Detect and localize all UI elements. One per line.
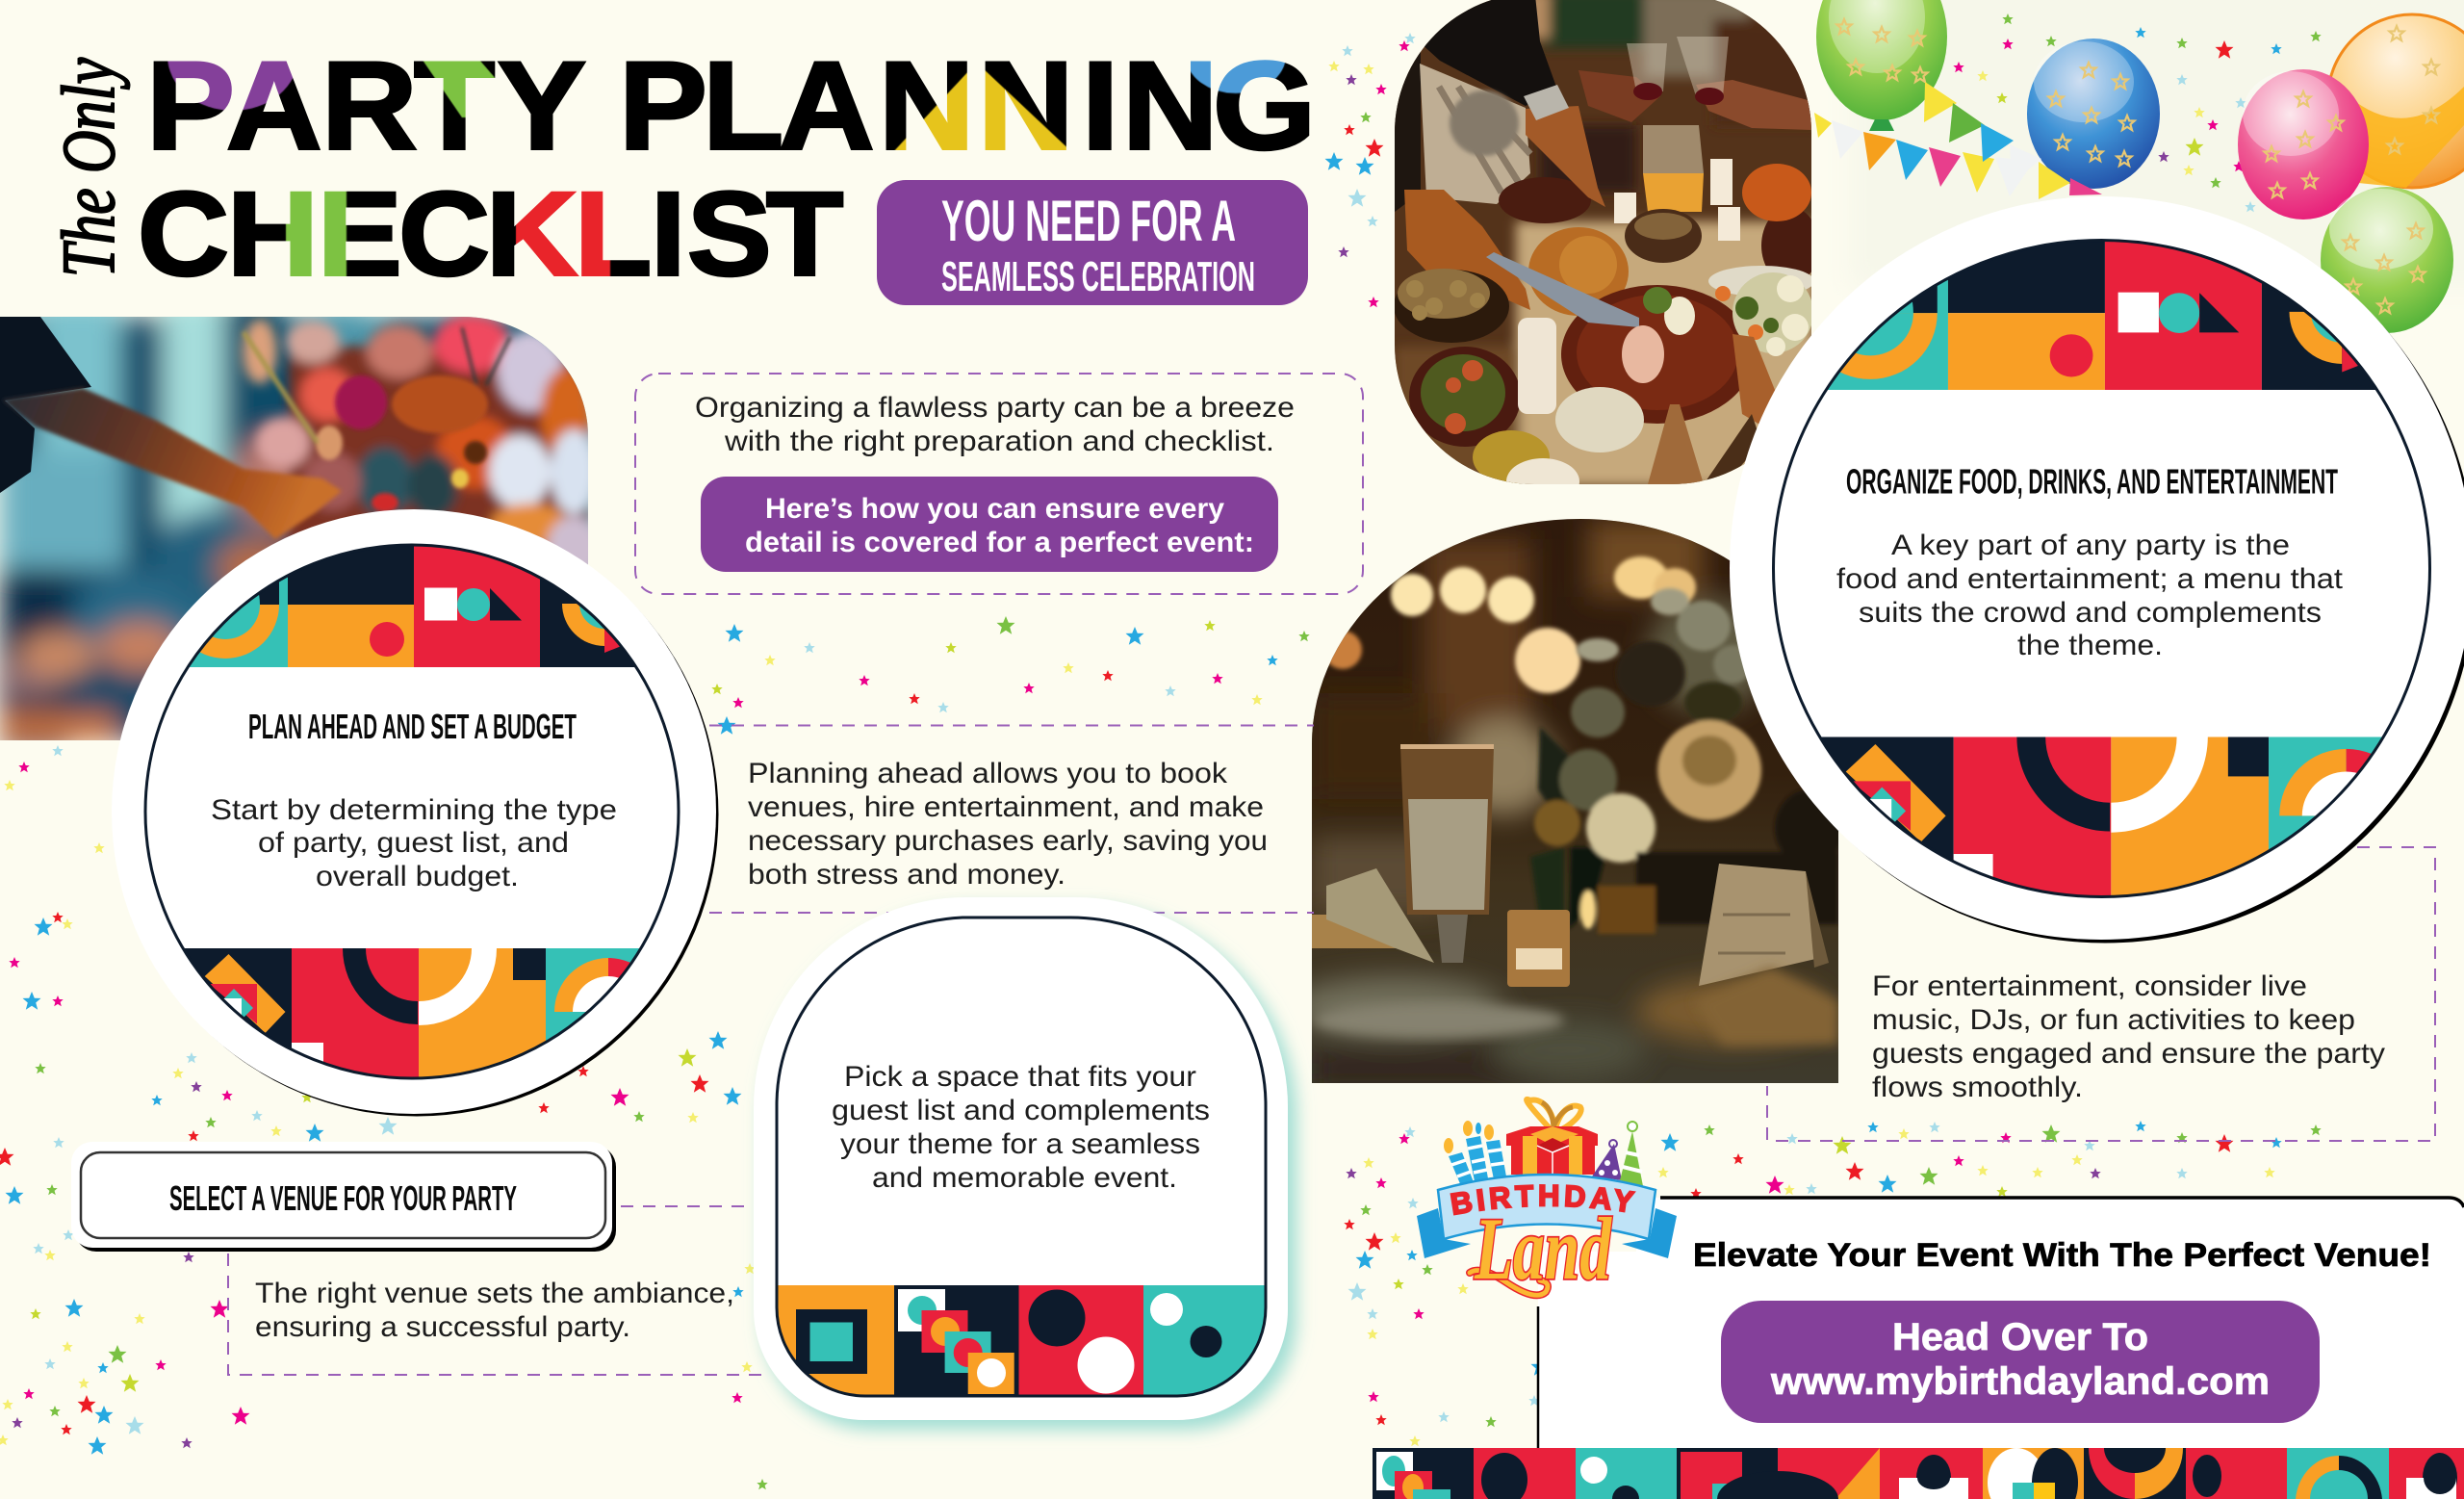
subtitle badge: SEAMLESS CELEBRATION <box>941 253 1255 300</box>
balloon: green <box>1816 0 1947 131</box>
body text: food and entertainment; a menu that <box>1836 563 2344 595</box>
intro text panel <box>635 374 1363 594</box>
body text: A key part of any party is the <box>1891 530 2290 561</box>
subtitle badge <box>877 180 1308 305</box>
body text: guest list and complements <box>832 1095 1210 1126</box>
icon: party hats <box>1592 1122 1643 1186</box>
mosaic band: bottom <box>1796 737 2426 898</box>
body text <box>211 794 617 892</box>
call to action panel <box>1538 1198 2464 1448</box>
title <box>46 37 1316 301</box>
intro callout pill: detail is covered for a perfect event: <box>745 527 1254 558</box>
script label: The Only: The Only <box>46 58 130 277</box>
heading box: select a venue: SELECT A VENUE FOR YOUR PARTY <box>169 1178 517 1218</box>
photo: candlelit table setting <box>1290 519 1844 1088</box>
planning ahead description <box>748 758 1268 891</box>
photo: carving food at table <box>1394 0 1819 504</box>
venue description <box>255 1278 734 1343</box>
logo: Birthday Land <box>1417 1096 1677 1300</box>
dashed connector: venue <box>228 1206 770 1375</box>
venue description: ensuring a successful party. <box>255 1311 630 1343</box>
subtitle badge: YOU NEED FOR A <box>941 189 1236 253</box>
entertainment description <box>1872 970 2385 1103</box>
title line: Checklist: CHECKLIST <box>138 168 843 301</box>
panel: venue card <box>754 897 1288 1420</box>
website pill <box>1721 1301 2320 1423</box>
entertainment description: music, DJs, or fun activities to keep <box>1872 1004 2355 1036</box>
body text: Start by determining the type <box>211 794 617 826</box>
body text <box>1836 530 2344 661</box>
entertainment description: For entertainment, consider live <box>1872 970 2307 1002</box>
planning ahead description: venues, hire entertainment, and make <box>748 791 1264 823</box>
wordmark: Birthday: BIRTHDAY <box>1450 1184 1636 1215</box>
website pill: Head Over To <box>1892 1316 2148 1358</box>
body text: the theme. <box>2017 630 2163 661</box>
photo: florist arranging flowers <box>0 298 601 751</box>
body text <box>832 1061 1210 1194</box>
mosaic band: bottom <box>185 948 639 1076</box>
dashed box: entertainment <box>1767 847 2435 1141</box>
icon: candles <box>1444 1121 1506 1186</box>
title line: Party Planning: PARTY PLANNING <box>146 37 1316 176</box>
body text: overall budget. <box>316 861 519 892</box>
intro callout pill <box>701 477 1278 572</box>
balloons and bunting <box>1814 0 2464 333</box>
dashed connector: planning ahead <box>709 726 1314 913</box>
heading box: select a venue <box>71 1142 616 1252</box>
decorative mosaic strip <box>1373 1448 2464 1499</box>
balloon: blue <box>2027 39 2160 189</box>
intro sentence: Organizing a flawless party can be a breeze <box>695 392 1295 424</box>
intro sentence <box>695 392 1295 457</box>
body text: your theme for a seamless <box>840 1128 1200 1160</box>
balloon: light green <box>2321 187 2453 333</box>
banner <box>1417 1173 1677 1258</box>
body text: suits the crowd and complements <box>1859 597 2322 629</box>
planning ahead description: both stress and money. <box>748 859 1065 891</box>
icon: gift box <box>1506 1099 1598 1175</box>
planning ahead description: Planning ahead allows you to book <box>748 758 1228 789</box>
intro sentence: with the right preparation and checklist. <box>724 426 1274 457</box>
heading: PLAN AHEAD AND SET A BUDGET <box>248 707 577 746</box>
body text: of party, guest list, and <box>258 827 569 859</box>
wordmark: Land: Land <box>1474 1200 1612 1298</box>
balloon: pink <box>2238 69 2369 220</box>
balloon: orange <box>2327 14 2464 188</box>
mosaic band: top <box>190 547 635 667</box>
website pill: www.mybirthdayland.com <box>1770 1360 2270 1403</box>
panel: organize food, drinks, and entertainment <box>1730 196 2464 943</box>
mosaic band <box>777 1285 1266 1396</box>
body text: Pick a space that fits your <box>844 1061 1196 1093</box>
bunting flags <box>1814 82 2102 199</box>
headline: Elevate Your Event With The Perfect Venue! <box>1693 1237 2431 1274</box>
mosaic band: top <box>1791 224 2419 390</box>
entertainment description: flows smoothly. <box>1872 1072 2083 1103</box>
planning ahead description: necessary purchases early, saving you <box>748 825 1268 857</box>
intro callout pill: Here’s how you can ensure every <box>765 493 1224 525</box>
entertainment description: guests engaged and ensure the party <box>1872 1038 2385 1070</box>
venue description: The right venue sets the ambiance, <box>255 1278 734 1309</box>
panel: plan ahead and set a budget <box>112 509 718 1117</box>
body text: and memorable event. <box>872 1162 1177 1194</box>
